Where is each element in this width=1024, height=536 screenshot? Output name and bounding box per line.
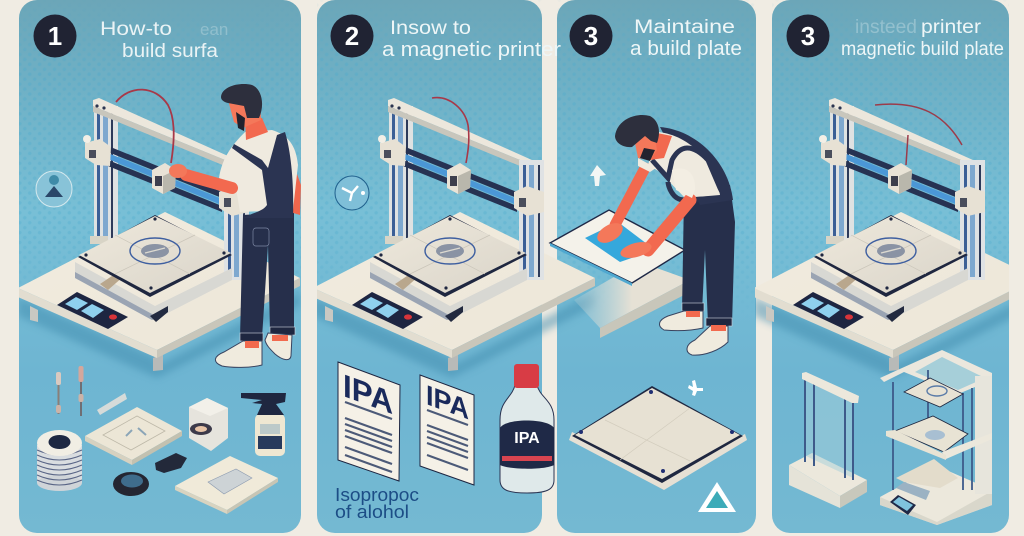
panel 1 background xyxy=(19,0,301,533)
beard xyxy=(640,148,655,161)
neck xyxy=(245,118,268,140)
heading 3: a build plate xyxy=(630,38,742,60)
small box xyxy=(189,398,228,451)
heading 4 xyxy=(841,17,1004,60)
front arm xyxy=(648,200,690,250)
heading 1 xyxy=(100,19,228,62)
printer 2 xyxy=(313,98,595,378)
IPA bottle: IPA xyxy=(514,430,540,447)
step number 3: 3 xyxy=(584,21,598,51)
icon: hourglass badge xyxy=(36,171,72,207)
heading 2: a magnetic printer xyxy=(382,39,561,61)
tape roll xyxy=(37,430,82,491)
step number 3 second xyxy=(786,14,830,58)
small frame xyxy=(789,372,867,508)
legs xyxy=(240,212,294,338)
printer wire 1 xyxy=(116,90,174,163)
IPA bottle xyxy=(500,364,554,493)
step number 1 xyxy=(34,14,76,58)
build plate being wiped xyxy=(550,210,685,286)
document 2 xyxy=(420,375,474,485)
beard xyxy=(236,112,245,131)
heading 2 xyxy=(382,18,561,61)
spray bottle xyxy=(241,393,286,456)
top shelf xyxy=(904,378,963,407)
heading 4: printer xyxy=(921,17,982,38)
back of overalls xyxy=(660,127,733,205)
document 1 xyxy=(338,362,400,481)
printer wire 2 xyxy=(432,98,469,163)
panel 2 background xyxy=(317,0,542,533)
shirt xyxy=(648,132,720,198)
icon: up arrow xyxy=(590,165,606,186)
assembled frame stack xyxy=(880,350,992,525)
hair xyxy=(221,84,262,118)
step number 3 second: 3 xyxy=(801,21,815,51)
shelf xyxy=(574,262,690,338)
caption: isopropyl alcohol: of alohol xyxy=(335,502,409,522)
icon: badge xyxy=(335,176,369,210)
rubber ring xyxy=(113,472,149,496)
screws xyxy=(56,366,84,416)
heading 1: How-to xyxy=(100,19,172,40)
step number 1: 1 xyxy=(48,21,62,51)
arm xyxy=(186,175,232,188)
face xyxy=(634,130,657,160)
shoes xyxy=(659,311,703,331)
tools group xyxy=(37,366,286,514)
bottom shelf xyxy=(896,459,958,488)
panel 1: how to clean build surface xyxy=(18,0,301,533)
sleeve xyxy=(672,168,695,198)
printer wire 4 xyxy=(875,104,962,165)
hair xyxy=(615,115,659,147)
worker 1 xyxy=(169,84,301,367)
heading 1: ean xyxy=(200,20,228,39)
heading 3: Maintaine xyxy=(634,17,735,38)
printer 4 xyxy=(754,98,1024,378)
overall strap xyxy=(652,148,725,200)
rear arm xyxy=(290,160,301,215)
shoes xyxy=(215,341,262,367)
caption: isopropyl alcohol xyxy=(335,485,419,522)
step number 2: 2 xyxy=(345,21,359,51)
step number 2 xyxy=(330,14,374,58)
spare plate xyxy=(569,386,747,490)
panel 3: maintain a build plate xyxy=(550,14,747,512)
scraper bar xyxy=(97,393,127,415)
caption: isopropyl alcohol: Isopropoc xyxy=(335,485,419,505)
panel 4: inserted printer magnetic build plate xyxy=(754,0,1024,533)
printer 1 xyxy=(18,98,300,378)
worker 3 xyxy=(594,115,735,355)
icon: triangle xyxy=(698,482,736,512)
document 1: IPA xyxy=(343,368,393,422)
panel 3 background xyxy=(557,0,756,533)
heading 4: magnetic build plate xyxy=(841,39,1004,60)
panel 4 background xyxy=(772,0,1009,533)
step number 3 xyxy=(570,14,612,58)
neck xyxy=(650,132,672,160)
square plate xyxy=(85,407,182,465)
document 2: IPA xyxy=(426,380,469,426)
heading 1: build surfa xyxy=(122,41,218,62)
heading 4: insteed xyxy=(855,17,917,38)
panel 2: install a magnetic printer xyxy=(313,0,595,533)
heading 3 xyxy=(630,17,742,60)
icon: plus xyxy=(688,380,703,396)
glasses xyxy=(155,453,187,473)
collar xyxy=(638,158,656,172)
heading 2: Insow to xyxy=(390,18,471,39)
flat sheet xyxy=(175,456,278,514)
shirt xyxy=(219,130,298,212)
legs xyxy=(682,185,735,325)
overalls bib and straps xyxy=(232,132,293,218)
middle shelf xyxy=(895,416,968,452)
pocket xyxy=(253,228,269,246)
rear arm xyxy=(615,168,645,225)
face xyxy=(228,100,261,128)
